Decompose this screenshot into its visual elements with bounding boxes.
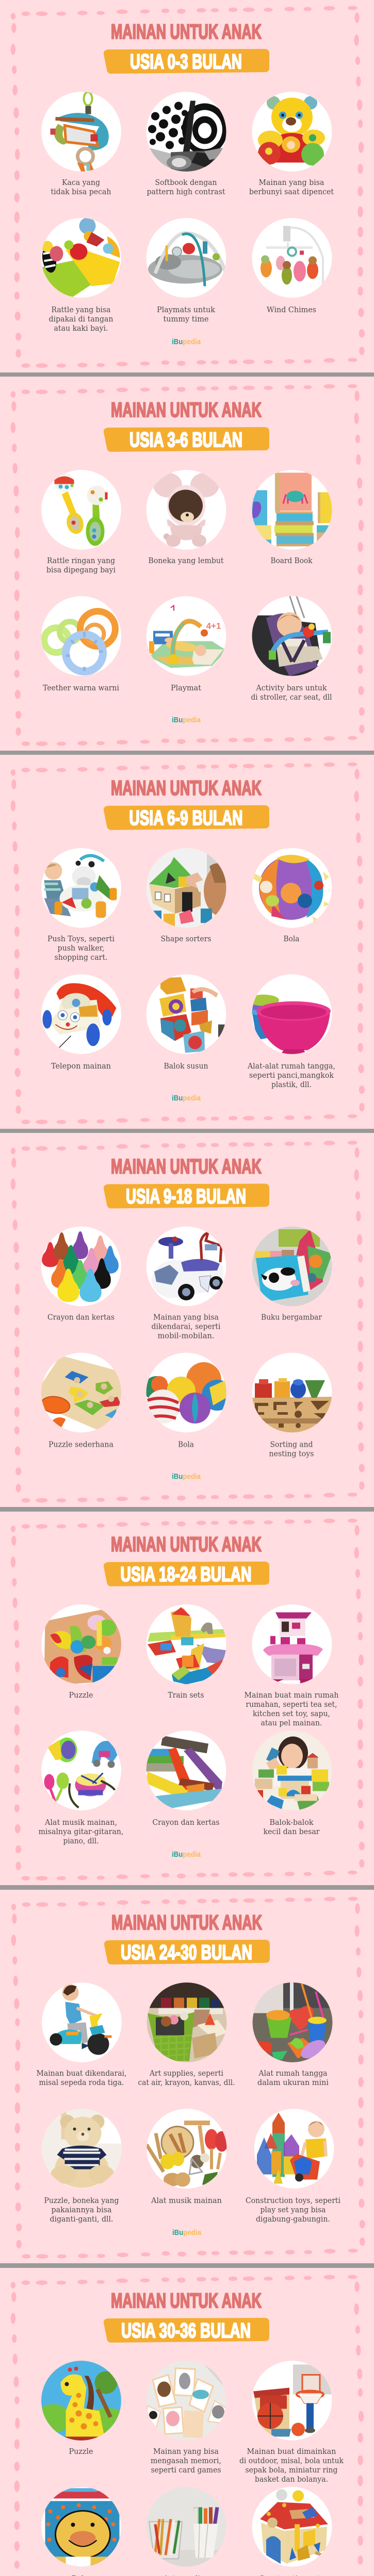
item: alat rumah tangga: [252, 1982, 333, 2087]
caption: atau kaki bayi.: [54, 324, 108, 333]
age badge: [104, 1562, 269, 1586]
item: playmat: [147, 596, 226, 692]
item: mainan berbunyi: [249, 92, 334, 196]
caption: Teether warna warni: [43, 683, 119, 692]
caption: Train sets: [168, 1690, 204, 1700]
caption: [157, 305, 216, 324]
caption: Alat rumah tangga: [258, 2069, 328, 2078]
caption: Telepon mainan: [51, 1061, 111, 1071]
caption: Art supplies, seperti: [149, 2069, 223, 2078]
caption: Balok-balok: [269, 1818, 314, 1827]
icon: plastic bowls: [247, 974, 332, 1054]
item: kaca: [41, 92, 121, 196]
caption: rumahan, seperti tea set,: [246, 1700, 337, 1709]
item: activity bars: [251, 595, 332, 702]
caption: Puzzle: [69, 2447, 93, 2456]
caption: dalam ukuran mini: [257, 2078, 329, 2087]
item: bola: [144, 1353, 233, 1449]
caption: mobil-mobilan.: [158, 1331, 215, 1341]
item: alat rumah tangga: [247, 974, 335, 1089]
caption: Mainan buat dimainkan: [247, 2447, 336, 2456]
icon: soft plush bear: [147, 470, 226, 550]
caption: play set yang bisa: [260, 2205, 326, 2214]
icon: wooden tool house: [252, 2487, 332, 2567]
item: art supplies: [138, 1982, 235, 2087]
item: buku bergambar: [252, 1226, 332, 1322]
icon: big crayons: [145, 1731, 226, 1810]
caption: [246, 2196, 340, 2224]
item: rattle ringan: [41, 470, 121, 574]
item: puzzle: [35, 2361, 128, 2456]
caption: dipakai di tangan: [48, 314, 113, 324]
caption: di outdoor, misal, bola untuk: [239, 2456, 344, 2465]
icon: teddy bear in striped shirt: [42, 2108, 123, 2189]
logo: iBupedia: [172, 716, 201, 724]
caption: Push Toys, seperti: [47, 934, 115, 943]
icon: pink kitchen set: [252, 1604, 332, 1685]
caption: bisa dipegang bayi: [46, 565, 116, 574]
caption: misalnya gitar-gitaran,: [38, 1827, 124, 1836]
icon: soft activity ball: [252, 848, 332, 928]
item: mainan dikendarai: [36, 1982, 127, 2087]
item: sorting and nesting: [252, 1353, 334, 1458]
caption: [51, 178, 111, 196]
item: teether: [41, 596, 121, 692]
caption: Activity bars untuk: [256, 683, 327, 692]
panel: usia 30-36 bulan: [11, 2275, 365, 2576]
icon: boy on tricycle: [42, 1982, 122, 2062]
icon: toy train track: [147, 1604, 227, 1685]
logo: iBupedia: [172, 1472, 201, 1481]
icon: mirror toy: [41, 92, 121, 172]
age badge: USIA 0-3 BULAN: [130, 50, 242, 73]
caption: di stroller, car seat, dll: [251, 692, 332, 702]
item: alat musik mainan: [38, 1731, 124, 1845]
caption: seperti panci,mangkok: [249, 1071, 334, 1080]
icon: wooden animal puzzles: [41, 1604, 122, 1685]
caption: [46, 556, 116, 574]
logo: iBupedia: [172, 338, 201, 346]
caption: tidak bisa pecah: [51, 187, 111, 196]
caption: misal sepeda roda tiga.: [39, 2078, 124, 2087]
caption: kitchen set toy, sapu,: [253, 1709, 330, 1718]
caption: kecil dan besar: [263, 1827, 320, 1836]
icon: magnetic blocks and toddler: [254, 2109, 334, 2189]
caption: [138, 2069, 235, 2087]
item: board book: [252, 470, 332, 565]
icon: baby in stroller with activity bar: [252, 595, 332, 676]
caption: Playmat: [171, 683, 201, 692]
caption: [48, 305, 113, 333]
item: card games: [146, 2361, 226, 2475]
icon: stacking blocks: [147, 974, 229, 1054]
icon: textured balls: [144, 1353, 233, 1432]
title: MAINAN UNTUK ANAK: [111, 1911, 262, 1934]
caption: Mainan buat dikendarai,: [36, 2069, 127, 2078]
item: boneka: [147, 470, 226, 565]
age badge: USIA 30-36 BULAN: [121, 2319, 251, 2342]
item: softbook: [147, 92, 227, 196]
caption: dikendarai, seperti: [152, 1322, 221, 1331]
caption: Kaca yang: [62, 178, 100, 187]
item: alat musik mainan: [147, 2109, 229, 2205]
caption: Mainan yang bisa: [153, 2447, 219, 2456]
icon: giraffe puzzle: [35, 2361, 128, 2441]
icon: wooden nesting toys: [252, 1353, 334, 1433]
title: MAINAN UNTUK ANAK: [111, 1155, 262, 1178]
icon: elephant playmat: [147, 218, 226, 298]
panel: usia 3-6 bulan: [11, 384, 365, 746]
caption: Sorting and: [270, 1439, 313, 1449]
caption: [257, 2069, 329, 2087]
caption: seperti card games: [151, 2465, 221, 2475]
item: construction toys: [246, 2109, 340, 2224]
caption: cat air, krayon, kanvas, dll.: [138, 2078, 235, 2087]
icon: mini basketball hoop set: [252, 2361, 332, 2441]
caption: diganti-ganti, dll.: [50, 2214, 113, 2224]
caption: [152, 1313, 221, 1341]
item: balok susun: [147, 974, 229, 1071]
icon: baby on activity playmat: 4+1: [206, 621, 221, 631]
caption: pakaiannya bisa: [52, 2205, 112, 2214]
age badge: USIA 9-18 BULAN: [126, 1185, 246, 1208]
caption: Rattle yang bisa: [52, 305, 111, 314]
age badge: USIA 18-24 BULAN: [121, 1563, 252, 1586]
title: MAINAN UNTUK ANAK: [111, 399, 262, 421]
item: balok-balok: [252, 1731, 332, 1836]
caption: [44, 2196, 119, 2224]
caption: [38, 1818, 124, 1845]
item: playmats: [147, 218, 226, 324]
caption: Buku bergambar: [261, 1313, 322, 1322]
item: puzzle: [41, 1604, 122, 1700]
title: MAINAN UNTUK ANAK: [111, 21, 262, 43]
caption: Crayon dan kertas: [47, 1313, 115, 1322]
icon: crayons and markers in glasses: [146, 2487, 226, 2567]
caption: plastik, dll.: [271, 1080, 312, 1089]
age badge: [104, 49, 269, 74]
item: push toys: [41, 848, 121, 962]
logo: iBupedia: [172, 1851, 201, 1859]
age badge: [104, 805, 269, 830]
caption: [269, 1439, 314, 1458]
caption: Construction toys, seperti: [246, 2196, 340, 2205]
item: crayon dan kertas: [145, 1731, 226, 1827]
caption: [247, 1061, 335, 1089]
icon: toy instruments: [41, 1731, 121, 1810]
caption: [245, 1690, 339, 1727]
icon: two rattles: [41, 470, 121, 550]
panel: usia 9-18 bulan: [11, 1141, 365, 1502]
item: art supplies: [146, 2487, 226, 2576]
caption: basket dan bolanya.: [255, 2475, 328, 2484]
icon: high contrast softbook: [147, 92, 227, 172]
caption: [151, 2447, 221, 2475]
icon: animal memory cards: [146, 2361, 226, 2441]
caption: [239, 2447, 344, 2484]
caption: atau pel mainan.: [261, 1718, 322, 1727]
caption: Alat musik mainan: [151, 2196, 222, 2205]
panel: usia 6-9 bulan: [11, 762, 365, 1124]
age badge: [104, 2318, 269, 2343]
caption: piano, dll.: [63, 1836, 99, 1845]
panel: usia 24-30 bulan: [11, 1897, 365, 2259]
caption: mengasah memori,: [151, 2456, 221, 2465]
icon: baby with push walker: [41, 848, 121, 928]
panel: usia 0-3 bulan: [11, 6, 365, 368]
caption: [47, 934, 115, 962]
age badge: [104, 427, 269, 452]
caption: tummy time: [163, 314, 209, 324]
caption: Alat musik mainan,: [44, 1818, 117, 1827]
caption: Mainan yang bisa: [153, 1313, 219, 1322]
caption: sepak bola, miniatur ring: [246, 2465, 338, 2475]
item: mainan dikendarai: [147, 1226, 226, 1341]
caption: Balok susun: [164, 1061, 208, 1071]
title: MAINAN UNTUK ANAK: [111, 1533, 262, 1556]
caption: Alat-alat rumah tangga,: [247, 1061, 335, 1071]
caption: [251, 683, 332, 702]
caption: Bola: [284, 934, 300, 943]
caption: [36, 2069, 127, 2087]
item: boneka: [42, 2108, 123, 2224]
caption: Mainan buat main rumah: [245, 1690, 339, 1700]
item: rattle: [40, 217, 121, 333]
caption: Playmats untuk: [157, 305, 216, 314]
title: MAINAN UNTUK ANAK: [111, 2290, 262, 2312]
item: ring basket: [239, 2361, 344, 2484]
icon: colourful teether rings: [41, 596, 121, 676]
caption: shopping cart.: [55, 953, 107, 962]
caption: Rattle ringan yang: [47, 556, 115, 565]
icon: art supplies basket: [147, 1982, 227, 2062]
caption: pattern high contrast: [147, 187, 225, 196]
caption: Shape sorters: [161, 934, 212, 943]
caption: [263, 1818, 320, 1836]
caption: [249, 178, 334, 196]
logo: iBupedia: [172, 2229, 202, 2237]
icon: ride-on police car: [147, 1226, 226, 1307]
icon: picture books: [252, 1226, 332, 1307]
icon: duck touch book: [41, 2487, 121, 2567]
title: MAINAN UNTUK ANAK: [111, 777, 262, 800]
caption: Crayon dan kertas: [153, 1818, 220, 1827]
age badge: [104, 1940, 270, 1964]
caption: [147, 178, 225, 196]
caption: Softbook dengan: [155, 178, 217, 187]
item: shape sorters: [147, 848, 226, 943]
caption: Board Book: [270, 556, 313, 565]
icon: baby on activity playmat: [147, 596, 226, 676]
caption: Puzzle sederhana: [48, 1439, 113, 1449]
icon: pull-along toy telephone: [41, 974, 121, 1054]
icon: musical bear: [252, 92, 332, 172]
caption: berbunyi saat dipencet: [249, 187, 334, 196]
item: puzzle sederhana: [40, 1353, 123, 1449]
age badge: [104, 1184, 269, 1209]
icon: wrist and foot rattles: [40, 217, 121, 298]
caption: digabung-gabungin.: [256, 2214, 330, 2224]
icon: stacked board books: [252, 470, 332, 550]
age badge: USIA 6-9 BULAN: [129, 807, 242, 829]
caption: push walker,: [58, 943, 104, 953]
item: construction sets: [252, 2487, 332, 2576]
caption: Puzzle, boneka yang: [44, 2196, 119, 2205]
icon: wooden music instruments: [147, 2109, 229, 2189]
item: bola: [252, 848, 332, 943]
age badge: USIA 24-30 BULAN: [121, 1941, 252, 1964]
item: train sets: [147, 1604, 227, 1700]
age badge: USIA 3-6 BULAN: [129, 429, 242, 451]
item: telepon: [41, 974, 121, 1071]
icon: crib mobile: [252, 218, 332, 298]
icon: cone crayons: [41, 1226, 121, 1307]
logo: iBupedia: [172, 1094, 201, 1103]
panel: usia 18-24 bulan: [11, 1519, 365, 1880]
item: main rumah rumahan: [245, 1604, 339, 1727]
item: crayon dan kertas: [41, 1226, 121, 1322]
caption: Puzzle: [69, 1690, 93, 1700]
icon: girl playing with blocks: [252, 1731, 332, 1810]
item: wind chimes: [252, 218, 332, 314]
caption: Wind Chimes: [267, 305, 316, 314]
caption: Mainan yang bisa: [259, 178, 324, 187]
icon: wooden peg puzzle: [40, 1353, 123, 1432]
icon: wooden shape sorter house: [147, 848, 226, 928]
icon: mini cleaning set: [252, 1982, 333, 2062]
caption: Boneka yang lembut: [149, 556, 224, 565]
caption: nesting toys: [269, 1449, 314, 1458]
caption: Bola: [178, 1439, 194, 1449]
item: buku: [41, 2487, 121, 2576]
